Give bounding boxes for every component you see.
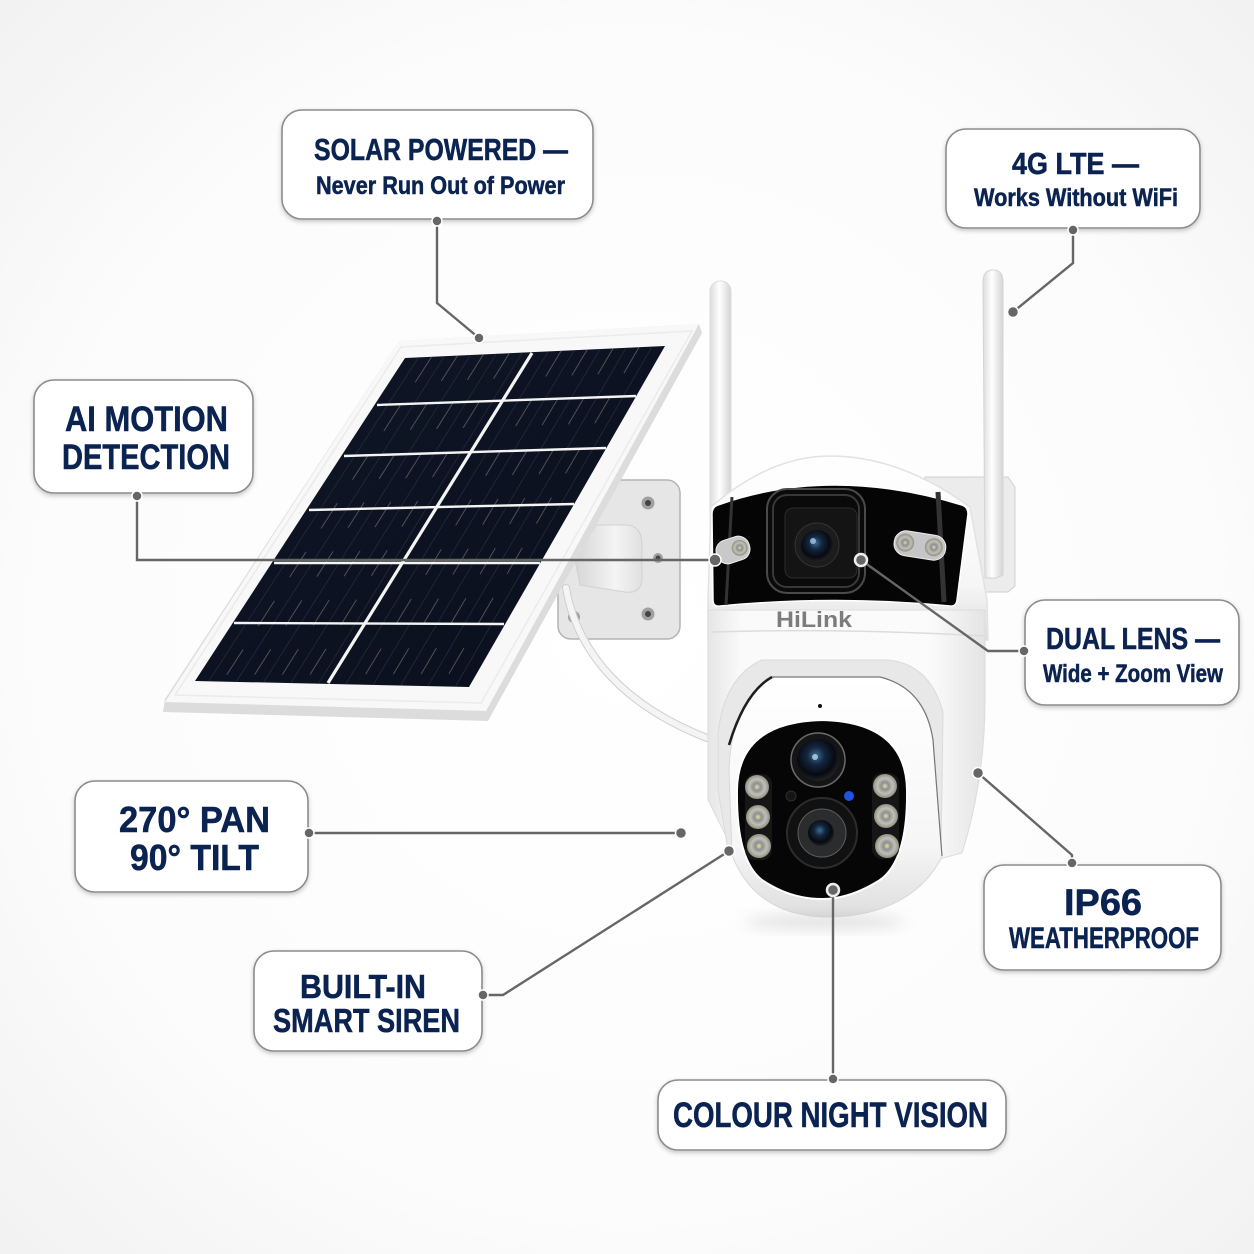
callout: pan and tilt (75, 781, 308, 892)
right LEDs (873, 774, 899, 858)
callout: built-in smart siren (254, 951, 482, 1051)
blue status light (844, 791, 854, 801)
callout: solar powered: Never Run Out of Power (316, 172, 565, 200)
callout: colour night vision (658, 1080, 1006, 1150)
callout: AI motion detection: DETECTION (62, 438, 230, 477)
callout: solar powered: SOLAR POWERED — (314, 132, 568, 167)
microphone hole (818, 704, 822, 708)
panel frame (163, 324, 702, 721)
callout: AI motion detection: AI MOTION (65, 400, 228, 439)
solar panel (163, 324, 702, 721)
callout: dual lens (1025, 600, 1239, 705)
left antenna (710, 281, 731, 561)
collar arch (718, 660, 943, 856)
callout: 4G LTE: 4G LTE — (1012, 146, 1139, 181)
right antenna (983, 270, 1003, 578)
leader: solar powered (432, 216, 484, 343)
callout: built-in smart siren: BUILT-IN (300, 968, 426, 1005)
callout: IP66 weatherproof (984, 865, 1221, 970)
brand logo: HiLink (776, 607, 853, 632)
upper front lens (791, 733, 845, 787)
callout: 4G LTE: Works Without WiFi (974, 184, 1178, 212)
leader: dual lens (855, 554, 1029, 656)
callout: pan and tilt: 90° TILT (130, 837, 259, 878)
black lower faceplate (737, 720, 907, 899)
leader: AI motion detection (132, 491, 721, 566)
callout: built-in smart siren: SMART SIREN (273, 1002, 460, 1039)
callout: solar powered (282, 110, 593, 219)
camera (708, 270, 1003, 917)
leader: IP66 (972, 768, 1077, 868)
leader: pan tilt (304, 828, 686, 838)
left LED plate (713, 533, 753, 567)
callout: colour night vision: COLOUR NIGHT VISION (673, 1096, 988, 1135)
lower front lens (787, 798, 857, 868)
camera lower dome (729, 677, 942, 917)
right LED plate (892, 529, 948, 562)
leader: colour night vision (827, 884, 839, 1084)
light sensor (786, 791, 796, 801)
left LEDs (745, 775, 771, 858)
LED strips (745, 773, 899, 860)
callout: 4G LTE (946, 129, 1200, 228)
callout: IP66 weatherproof: IP66 (1064, 882, 1142, 923)
upper lens module (767, 489, 865, 593)
right antenna mount (925, 477, 1015, 592)
camera neck and base (708, 610, 985, 860)
callout: AI motion detection (34, 380, 253, 493)
solar cells (195, 346, 665, 687)
dark gap under collar (729, 677, 772, 745)
callout: pan and tilt: 270° PAN (119, 799, 270, 840)
right side shadow line (772, 677, 942, 856)
leader: 4G LTE (1008, 225, 1078, 318)
power cable (566, 588, 707, 738)
camera ground shadow (745, 915, 905, 929)
black upper band (712, 485, 968, 606)
solar panel wall bracket (558, 480, 680, 639)
camera upper housing (708, 456, 988, 640)
leader: siren (478, 846, 734, 1000)
